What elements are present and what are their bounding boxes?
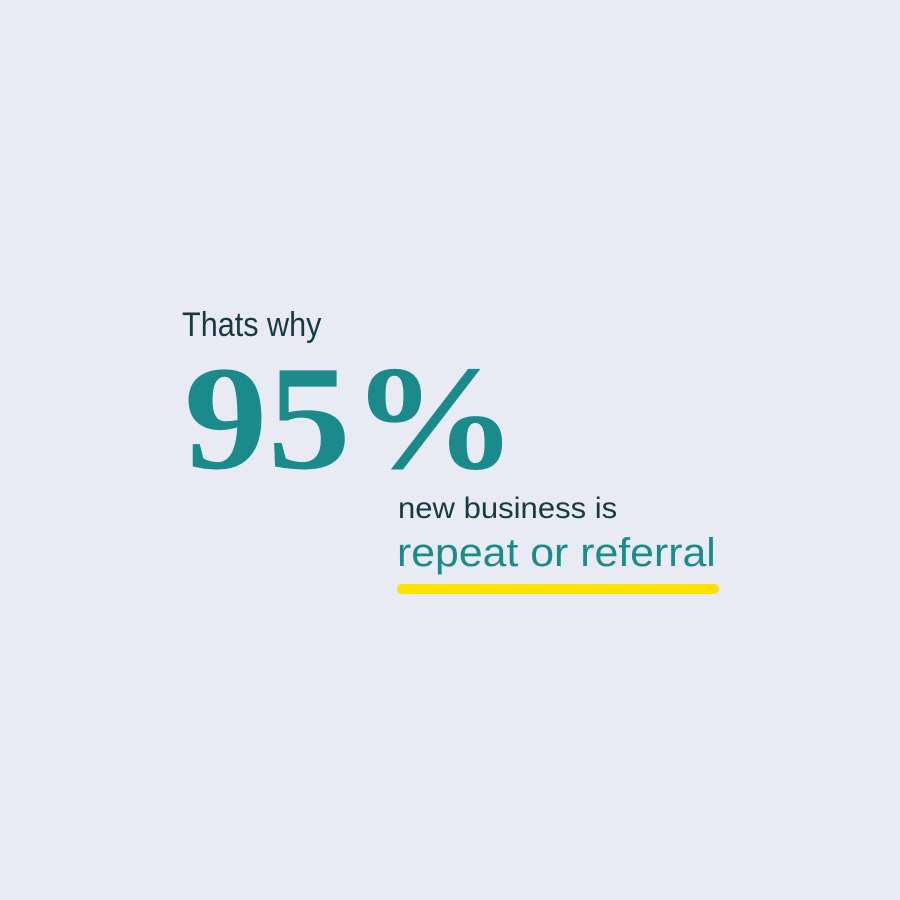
text: new business is: new business is <box>398 492 617 525</box>
text: repeat or referral: repeat or referral <box>397 531 716 575</box>
headline: 95%: 95% <box>184 336 518 501</box>
text: Thats why: Thats why <box>182 306 321 344</box>
underline highlight <box>397 584 719 594</box>
